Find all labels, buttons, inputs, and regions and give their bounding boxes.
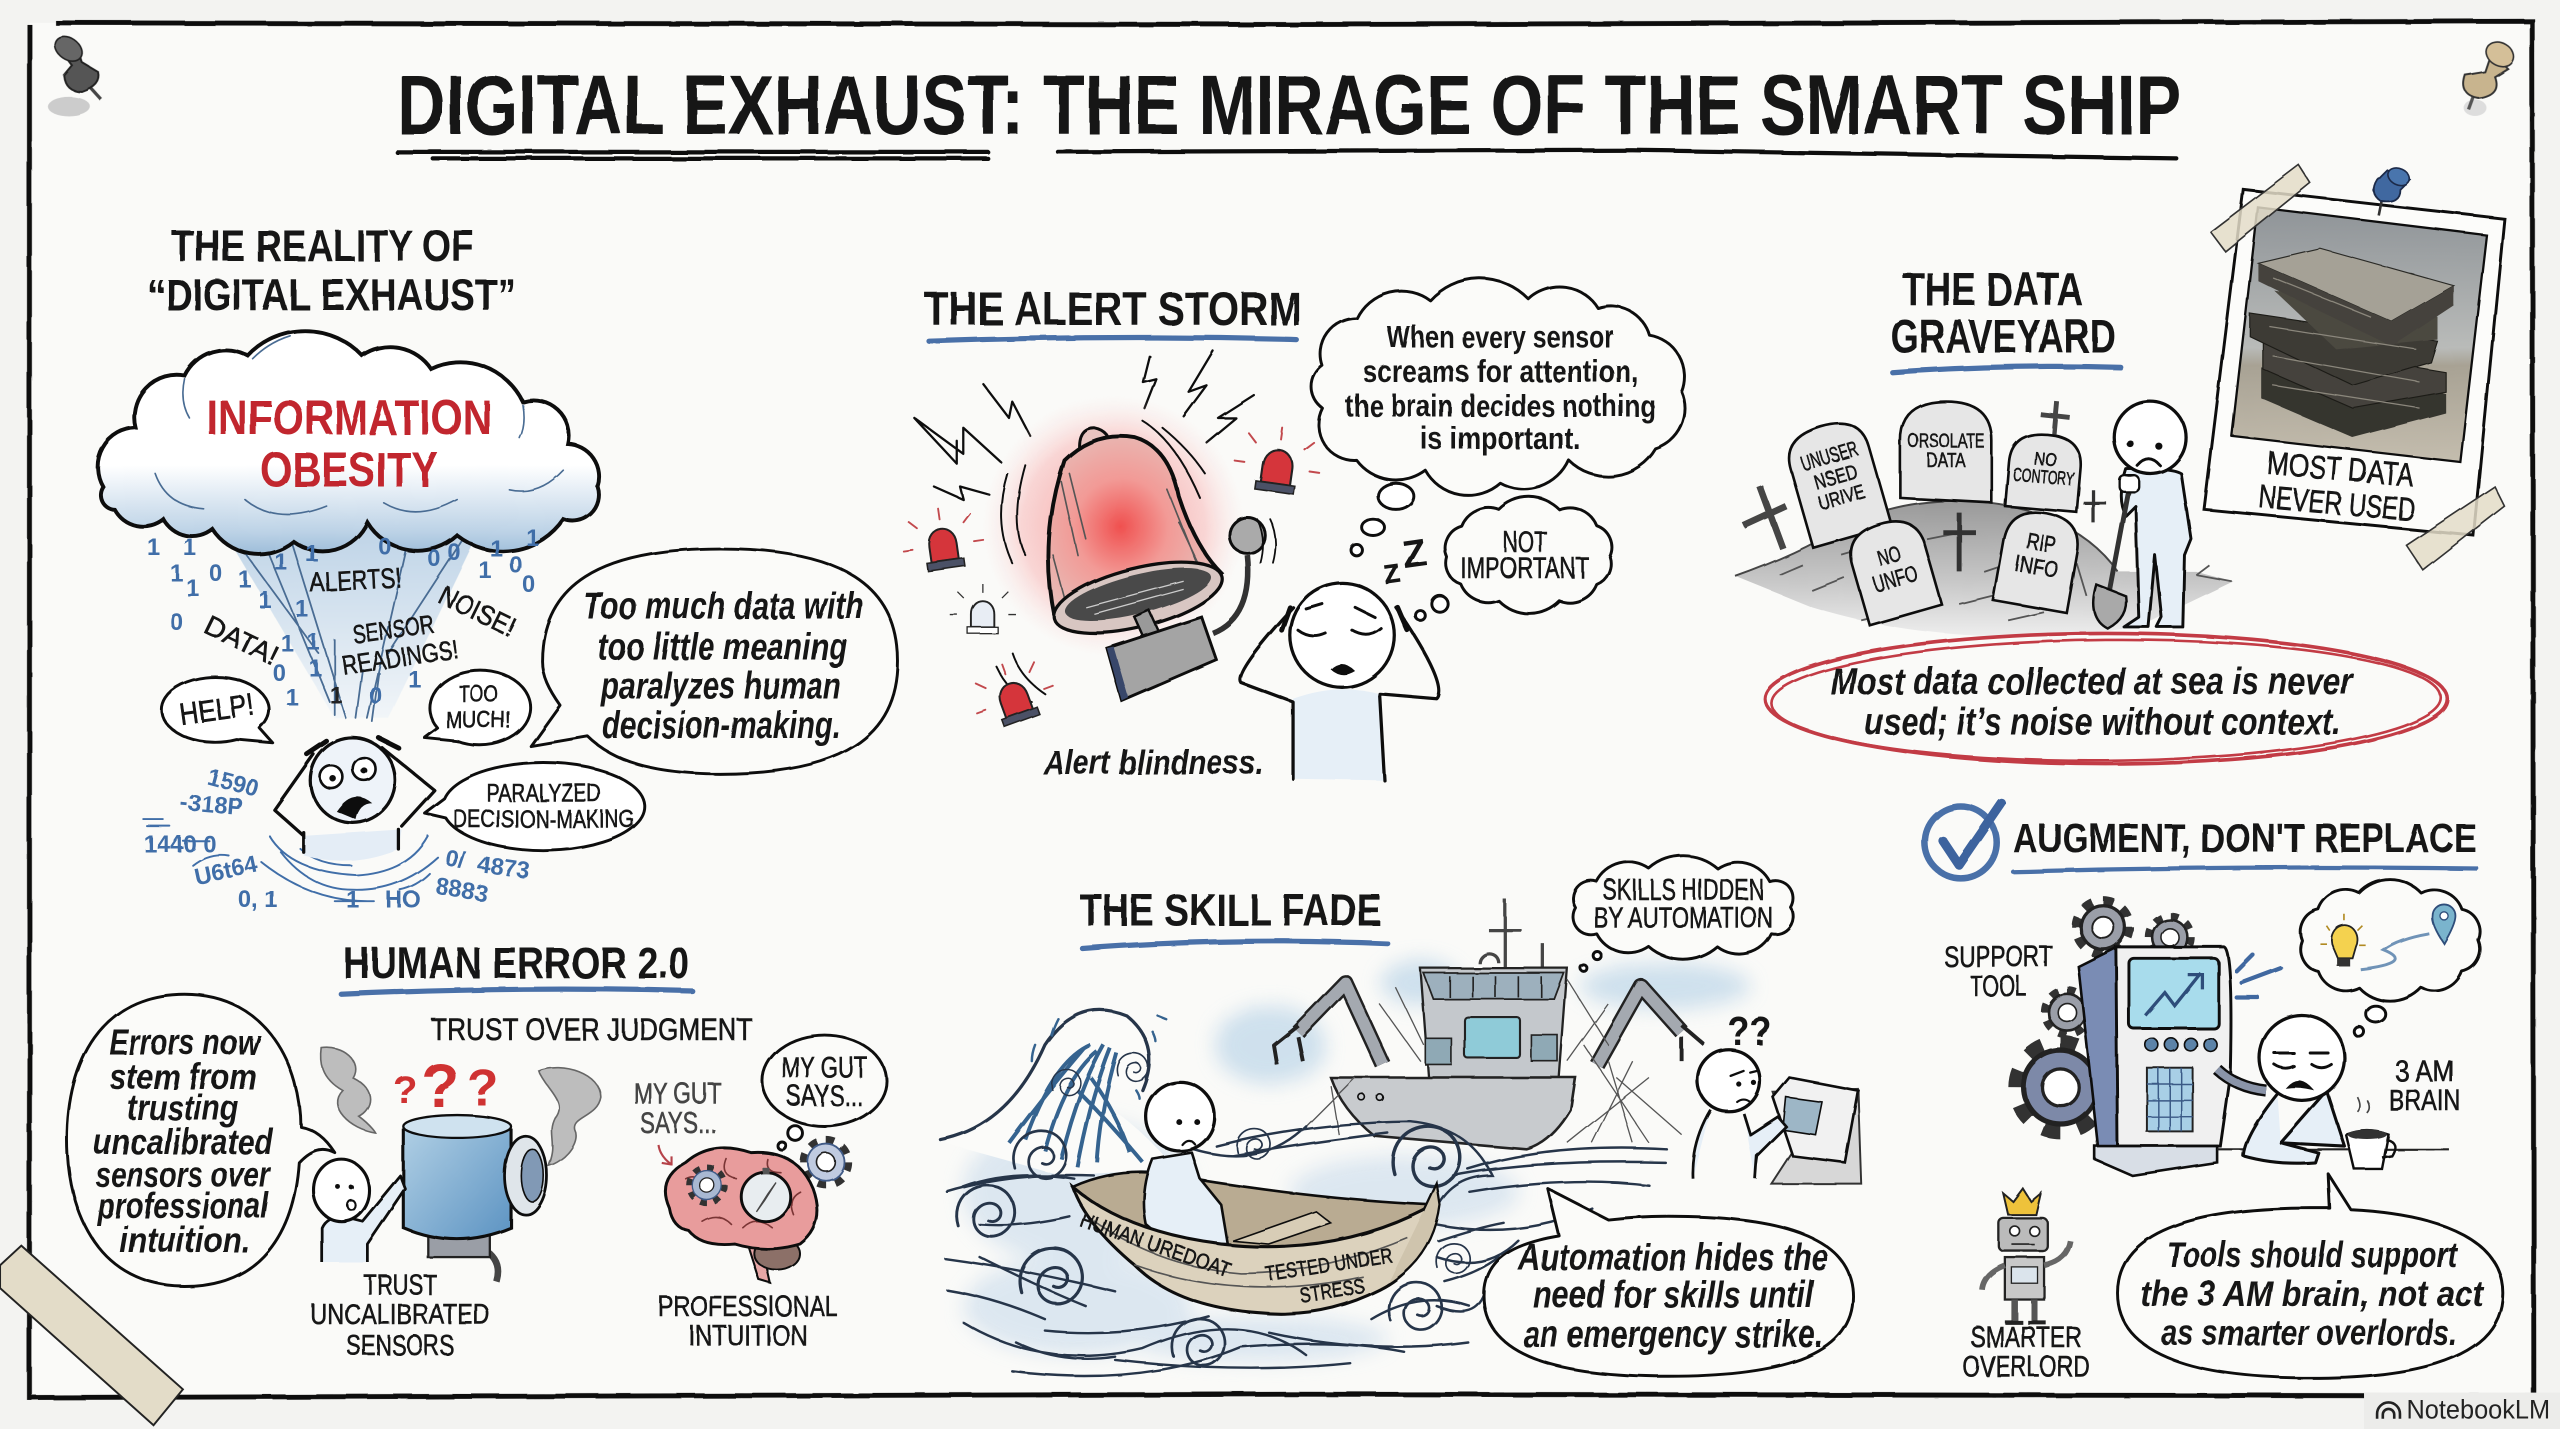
cloud label: OBESITY [260, 444, 438, 498]
drowning data: numbers and swirls: 1 [346, 888, 359, 914]
thought bubble: my gut says: MY GUT [781, 1052, 868, 1085]
drowning data: numbers and swirls: 0/ [443, 845, 467, 874]
shouted data labels: READINGS! [340, 634, 460, 680]
binary data rain [147, 525, 539, 711]
gears [2018, 902, 2190, 1130]
speech bubble: paralyzed decision-making: DECISION-MAKING [453, 806, 634, 834]
label: my gut says [633, 1078, 722, 1140]
gravestone: rip info: INFO [2013, 550, 2061, 583]
binary data rain: 1 [478, 558, 492, 584]
speech bubble: too much data [531, 549, 898, 774]
polaroid photo of hard drives: MOST DATA [2266, 444, 2416, 493]
label: 3 am brain: BRAIN [2389, 1084, 2460, 1117]
data funnel [220, 526, 482, 722]
shouted data labels: NOISE! [434, 579, 521, 643]
binary data rain: 1 [408, 667, 421, 693]
figure: operator at console [1693, 1050, 1861, 1184]
figure: person in boat [1144, 1082, 1228, 1244]
question marks: ?? [1727, 1008, 1771, 1054]
photo [2232, 207, 2486, 462]
thought bubble: my gut says: SAYS... [786, 1079, 863, 1112]
drowning data: numbers and swirls: 1590 [204, 764, 262, 803]
thought bubble: my gut says [762, 1035, 887, 1150]
speech bubble: errors now stem: stem from [109, 1056, 256, 1097]
speech bubble: automation hides: an emergency strike. [1523, 1313, 1824, 1355]
icon: red alarm lights [898, 422, 1325, 735]
speech bubble: errors now stem: intuition. [119, 1219, 250, 1260]
speech bubble: too much [425, 670, 531, 745]
heading [147, 222, 516, 320]
heading: THE REALITY OF [171, 222, 474, 271]
panel: the data graveyard [1735, 164, 2504, 764]
figure: person trusting sensor [314, 1159, 405, 1262]
figure: panicked person [274, 738, 434, 861]
gravestone: no context [2005, 431, 2083, 512]
thought cloud: idea to destination [2300, 880, 2480, 1001]
heading [1079, 885, 1388, 949]
heading: AUGMENT, DON'T REPLACE [2013, 815, 2477, 861]
speech bubble: too much data: paralyzes human [600, 665, 841, 707]
speech bubble: paralyzed decision-making [425, 762, 645, 851]
thought cloud: not important: NOT [1503, 526, 1547, 559]
speech bubble: help [161, 677, 273, 743]
sea wash [963, 1118, 1518, 1362]
binary data rain: 0 [447, 540, 461, 566]
cloud: information obesity [98, 331, 599, 554]
label: my gut says: SAYS... [640, 1107, 717, 1140]
robot arms [1273, 980, 1704, 1143]
boat lettering: TESTED UNDER [1264, 1244, 1394, 1287]
binary data rain: 1 [286, 685, 299, 711]
drowning data: numbers and swirls: 0, 1 [238, 888, 278, 914]
speech bubble: too much: MUCH! [446, 707, 511, 734]
label: trust uncalibrated sensors: SENSORS [346, 1330, 454, 1362]
thought cloud: not important [1445, 497, 1612, 613]
label: trust uncalibrated sensors: TRUST [363, 1270, 437, 1302]
speech bubble: paralyzed decision-making: PARALYZED [487, 780, 601, 808]
panel: reality of digital exhaust [98, 222, 898, 914]
label: 3 am brain [2389, 1055, 2460, 1117]
drowning data: numbers and swirls [144, 764, 532, 914]
crosses [1744, 402, 2106, 571]
brain with compass [665, 1148, 817, 1283]
label: smarter overlord: OVERLORD [1962, 1350, 2090, 1383]
binary data rain: 0 [428, 547, 441, 573]
arrow to brain [658, 1144, 671, 1164]
icon: unlit alarm light [950, 584, 1016, 634]
thought dots [1351, 483, 1448, 620]
thought cloud: not important: IMPORTANT [1460, 552, 1589, 585]
thought cloud: every sensor screams [1312, 278, 1685, 495]
label: professional intuition [658, 1291, 838, 1352]
speech bubble: too much data: too little meaning [598, 626, 847, 668]
automated ship [1331, 900, 1575, 1149]
label: support tool [1944, 940, 2053, 1003]
heading: THE SKILL FADE [1079, 885, 1381, 936]
shouted data labels: ALERTS! [309, 562, 402, 598]
robot arm resting on the person [2217, 1069, 2266, 1091]
gravestone: no info: UNFO [1870, 560, 1921, 598]
red question marks: ? [467, 1059, 499, 1117]
rowing boat hull [1073, 1184, 1440, 1314]
polaroid photo of hard drives: NEVER USED [2258, 478, 2417, 528]
label: trust uncalibrated sensors [310, 1270, 490, 1362]
speech bubble: too much data: Too much data with [583, 585, 864, 627]
binary data rain: 0 [379, 535, 392, 561]
binary data rain: 0 [509, 553, 523, 579]
speech bubble: errors now stem: uncalibrated [93, 1121, 274, 1162]
thought cloud: skills hidden: SKILLS HIDDEN [1602, 874, 1764, 907]
gravestone: no info [1844, 514, 1942, 625]
heading: THE ALERT STORM [924, 283, 1301, 336]
boat lettering: STRESS [1298, 1275, 1366, 1308]
snoring zz [1380, 531, 1429, 592]
speech bubble: automation hides: Automation hides the [1518, 1236, 1829, 1278]
speech bubble: too much data: decision-making. [602, 704, 841, 746]
subheading: trust over judgment: TRUST OVER JUDGMENT [431, 1012, 753, 1047]
drowning data: numbers and swirls: HO [385, 888, 421, 914]
speech bubble: tools should support: Tools should support [2166, 1234, 2459, 1275]
binary data rain: 1 [296, 597, 309, 623]
binary data rain: 1 [307, 630, 320, 656]
binary data rain: 1 [526, 525, 539, 551]
panel: augment, don't replace [1925, 803, 2503, 1383]
figure: tired person at table [2217, 1015, 2449, 1163]
callout: red circled text: Most data collected at sea is never [1830, 660, 2355, 702]
heading: THE DATA [1902, 263, 2083, 316]
speech bubble: automation hides [1484, 1189, 1853, 1376]
swirling sea [945, 1122, 1667, 1376]
label: 3 am brain: 3 AM [2395, 1055, 2454, 1088]
binary data rain: 1 [170, 561, 183, 587]
label: professional intuition: PROFESSIONAL [658, 1291, 838, 1323]
binary data rain: 0 [369, 684, 382, 710]
tape top left of photo [2211, 165, 2310, 251]
support machine [2078, 947, 2281, 1175]
boat lettering: HUMAN UREDOAT [1078, 1209, 1233, 1282]
speech bubble: automation hides: need for skills until [1533, 1274, 1815, 1316]
gravestone: obsolete data: DATA [1927, 450, 1966, 472]
cloud label: INFORMATION [207, 391, 492, 445]
label: smarter overlord [1962, 1321, 2090, 1383]
speech bubble: errors now stem [67, 994, 335, 1286]
binary data rain: 0 [170, 610, 183, 636]
thought cloud: skills hidden [1573, 856, 1793, 971]
thought dots [2354, 1006, 2385, 1037]
icon: blue check mark [1925, 803, 2002, 878]
gravestone: unused drive: UNUSER [1798, 438, 1861, 476]
gravestone: unused drive: NSED [1811, 461, 1860, 494]
icon: crowned robot [1982, 1189, 2070, 1322]
binary data rain: 1 [330, 684, 343, 710]
speech bubble: errors now stem: sensors over [96, 1154, 272, 1195]
NotebookLM watermark [2364, 1393, 2560, 1429]
caption: alert blindness: Alert blindness. [1042, 744, 1264, 782]
speech bubble: errors now stem: professional [96, 1185, 269, 1226]
thought cloud: skills hidden: BY AUTOMATION [1593, 901, 1773, 934]
snoring zz: Z [1399, 531, 1429, 577]
uncalibrated sensor tank [403, 1115, 547, 1282]
gravestone: obsolete data [1900, 402, 1992, 503]
binary data rain: 1 [186, 576, 199, 602]
drowning data: numbers and swirls: -318P [179, 790, 244, 821]
gravestone: rip info: RIP [2024, 527, 2058, 558]
red question marks: ? [421, 1052, 459, 1121]
binary data rain: 0 [209, 561, 222, 587]
boat interior [1073, 1172, 1433, 1250]
icon: dark push pin top left [47, 32, 101, 116]
drowning data: numbers and swirls: 8883 [433, 873, 490, 908]
shouted data labels: SENSOR [351, 609, 436, 650]
label: smarter overlord: SMARTER [1971, 1321, 2082, 1354]
binary data rain: 1 [183, 535, 196, 561]
blue sky wash [1215, 960, 1750, 1084]
figure: sad person with shovel [2093, 402, 2191, 629]
gravestone: obsolete data: ORSOLATE [1908, 430, 1984, 452]
binary data rain: 1 [274, 550, 288, 576]
label: my gut says: MY GUT [633, 1078, 722, 1111]
binary data rain: 1 [147, 535, 160, 561]
title: DIGITAL EXHAUST: THE MIRAGE OF THE SMART SHIP [397, 57, 2181, 152]
speech bubble: tools should support: as smarter overlords. [2162, 1312, 2457, 1353]
binary data rain: 1 [258, 587, 271, 613]
speech bubble: errors now stem: Errors now [109, 1022, 261, 1063]
heading [1891, 263, 2121, 372]
big wave [940, 1010, 1176, 1175]
callout: red circled text: used; it’s noise without context. [1864, 701, 2341, 743]
label: trust uncalibrated sensors: UNCALIBRATED [310, 1299, 490, 1331]
red question marks: ? [394, 1070, 417, 1113]
binary data rain: 0 [273, 661, 286, 687]
boat lettering [1078, 1209, 1394, 1308]
binary data rain: 1 [281, 631, 294, 657]
speech bubble: too much: TOO [459, 681, 498, 708]
icon: gear beside brain [805, 1141, 848, 1184]
burial mound [1735, 501, 2233, 636]
gravestone: unused drive: URIVE [1816, 481, 1867, 515]
icon: beige push pin top right [2464, 37, 2518, 116]
drowning data: numbers and swirls: U6t64 [192, 852, 261, 891]
speech bubble: tools should support: the 3 AM brain, not act [2140, 1273, 2485, 1314]
icon: blue push pin [2374, 164, 2412, 216]
heading: GRAVEYARD [1891, 311, 2116, 364]
snoring zz: z [1380, 549, 1403, 592]
speech bubble: errors now stem: trusting [127, 1087, 238, 1128]
speech bubble: tools should support [2118, 1174, 2503, 1378]
gravestone: no context: CONTORY [2012, 464, 2076, 490]
panel: the alert storm [898, 278, 1685, 782]
label: support tool: TOOL [1970, 970, 2027, 1003]
drowning data: numbers and swirls: 4873 [476, 852, 532, 885]
icon: coffee mug [2346, 1097, 2395, 1169]
polaroid photo of hard drives [2204, 189, 2504, 535]
shouted data labels: DATA! [200, 609, 284, 671]
gravestone: no info: NO [1874, 540, 1903, 571]
label: support tool: SUPPORT [1944, 940, 2053, 973]
binary data rain: 0 [522, 573, 536, 599]
shouted data labels [200, 562, 521, 680]
binary data rain: 1 [305, 542, 319, 568]
gravestone: no context: NO [2033, 447, 2058, 470]
binary data rain: 1 [309, 656, 322, 682]
speech bubble: help: HELP! [177, 687, 256, 732]
tape bottom right of photo [2406, 487, 2504, 570]
gravestone: unused drive [1782, 415, 1892, 548]
alarm bell [983, 395, 1276, 702]
thought cloud: every sensor screams: screams for attention, [1362, 354, 1638, 389]
NotebookLM watermark: NotebookLM [2406, 1395, 2550, 1425]
thought cloud: every sensor screams: the brain decides nothing [1345, 388, 1655, 423]
red question marks [394, 1052, 499, 1121]
callout: red circled text [1765, 633, 2447, 764]
binary data rain: 1 [490, 537, 503, 563]
cloud label [207, 391, 492, 498]
thought cloud: every sensor screams: is important. [1420, 421, 1580, 456]
tape bottom-left corner [0, 1246, 183, 1425]
lightning bolts [914, 351, 1254, 500]
gravestone: rip info [1993, 507, 2083, 613]
label: professional intuition: INTUITION [688, 1320, 807, 1352]
thought cloud: every sensor screams: When every sensor [1387, 320, 1614, 355]
heading: “DIGITAL EXHAUST” [147, 271, 516, 320]
binary data rain: 1 [238, 568, 252, 594]
heading: HUMAN ERROR 2.0 [343, 939, 689, 988]
panel: the skill fade [940, 856, 1861, 1376]
drowning data: numbers and swirls: 1440 0 [144, 832, 216, 858]
figure: person covering ears [1240, 583, 1439, 780]
panel: human error 2.0 [67, 939, 887, 1362]
smoke plumes [321, 1048, 601, 1166]
